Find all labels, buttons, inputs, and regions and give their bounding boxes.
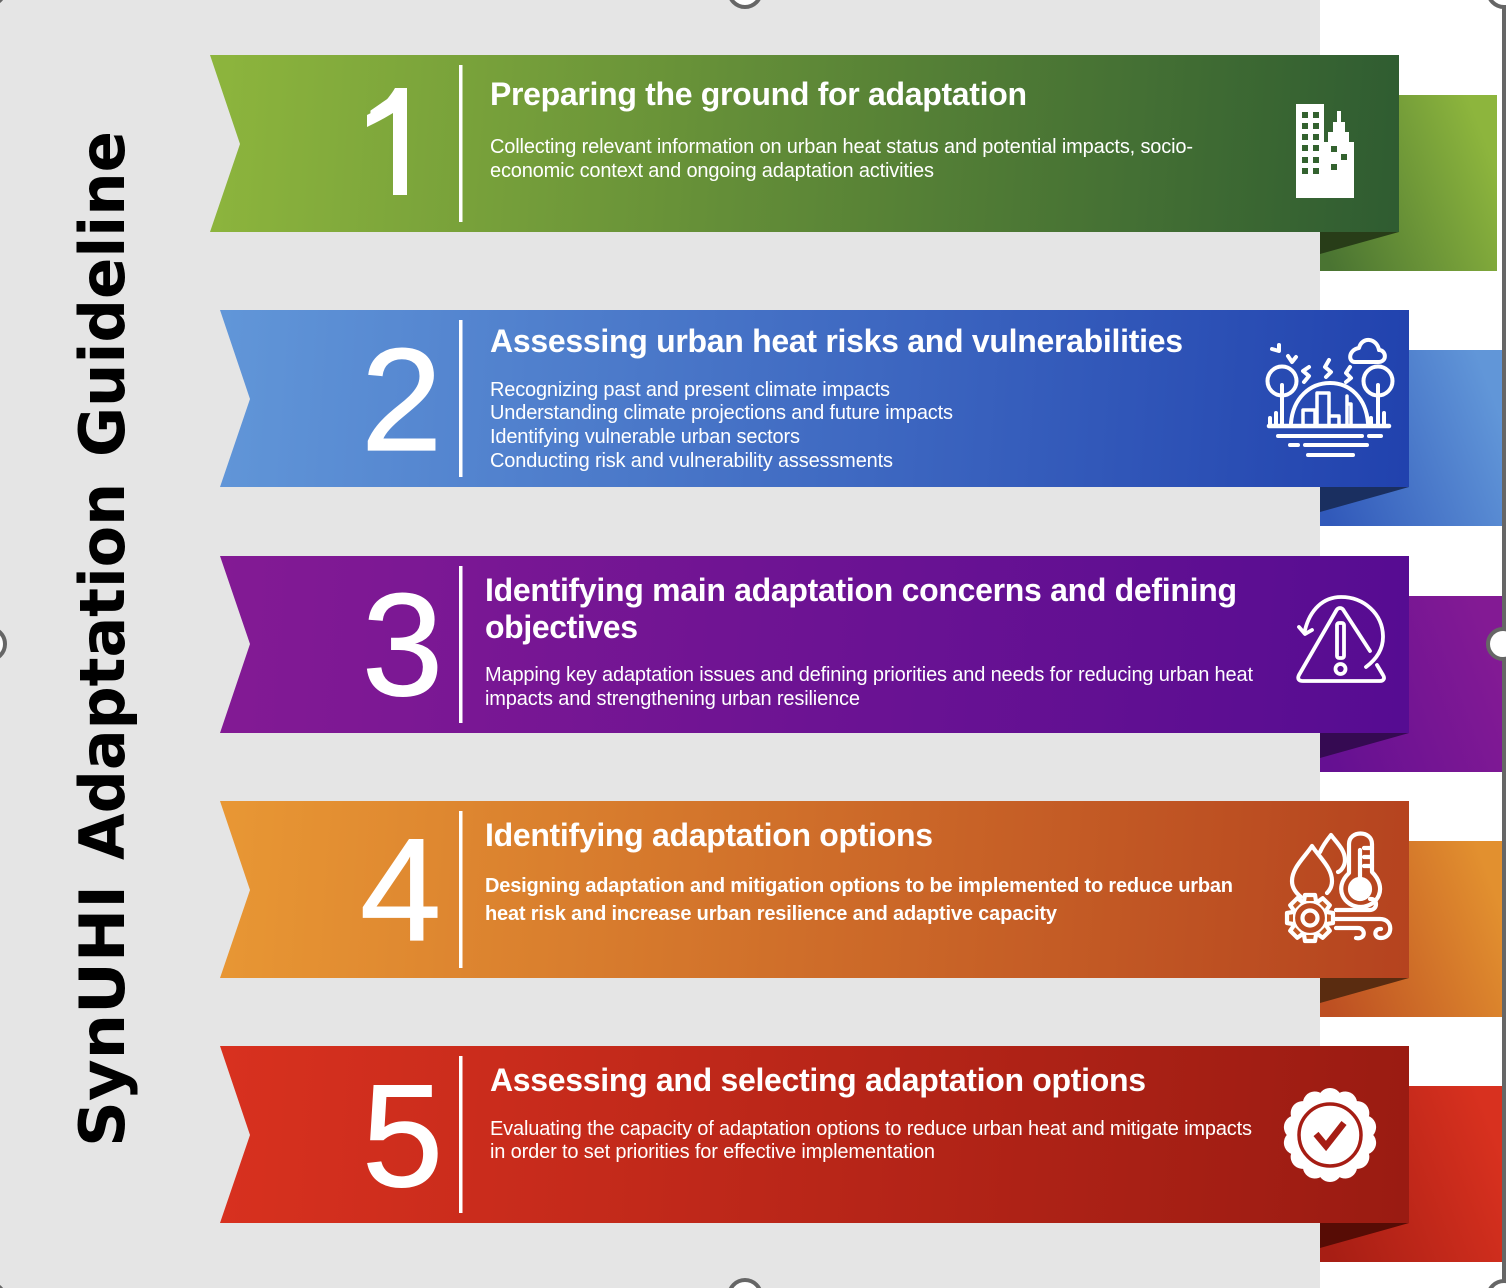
description 1: Collecting relevant information on urban heat status and potential impacts, socio- (490, 136, 1193, 158)
panel: step 4 (220, 801, 1504, 1017)
heading 3 (485, 572, 1237, 645)
heading 4: Identifying adaptation options (485, 817, 933, 853)
ribbon fold 4 (1320, 978, 1409, 1003)
ribbon front 2 (220, 310, 1409, 487)
heading 3: objectives (485, 609, 638, 645)
description 5 (490, 1118, 1252, 1163)
icon: warning with circular arrow (1298, 597, 1384, 681)
title: SynUHI Adaptation Guideline: Adaptation (66, 483, 139, 860)
number 4: 4 (360, 808, 441, 971)
icon: approval badge with check mark (1282, 1087, 1378, 1183)
ribbon back 5 (1320, 1086, 1504, 1262)
description 1 (490, 136, 1193, 182)
description 2: Recognizing past and present climate impacts (490, 379, 890, 401)
description 2 (490, 379, 953, 472)
number 1 (367, 88, 407, 195)
description 2: Identifying vulnerable urban sectors (490, 426, 800, 448)
divider 1 (459, 65, 462, 222)
number 2: 2 (361, 318, 442, 481)
description 3: impacts and strengthening urban resilience (485, 688, 860, 710)
ribbon fold 3 (1320, 733, 1409, 758)
divider 3 (459, 566, 462, 723)
panel: step 5 (220, 1046, 1504, 1262)
title: SynUHI Adaptation Guideline: SynUHI (66, 885, 139, 1147)
icon: water, temperature, gear and wind (1287, 834, 1390, 941)
heading 2: Assessing urban heat risks and vulnerabilities (490, 323, 1183, 359)
heading 5: Assessing and selecting adaptation options (490, 1062, 1146, 1098)
ribbon back 3 (1320, 596, 1504, 772)
title: SynUHI Adaptation Guideline (66, 131, 139, 1147)
ribbon back 4 (1320, 841, 1504, 1017)
panel: step 3 (220, 556, 1504, 772)
divider 5 (459, 1056, 462, 1213)
description 1: economic context and ongoing adaptation activities (490, 160, 934, 182)
heading 3: Identifying main adaptation concerns and defining (485, 572, 1237, 608)
ribbon fold 1 (1320, 232, 1399, 254)
description 2: Understanding climate projections and future impacts (490, 402, 953, 424)
ribbon front 5 (220, 1046, 1409, 1223)
description 4 (485, 875, 1233, 925)
icon: buildings (1296, 104, 1354, 198)
number 1: 1 (357, 63, 438, 226)
ribbon fold 2 (1320, 487, 1409, 512)
heading 1: Preparing the ground for adaptation (490, 76, 1027, 112)
ribbon front 1 (210, 55, 1399, 232)
title: SynUHI Adaptation Guideline: Guideline (66, 131, 139, 457)
description 5: in order to set priorities for effective implementation (490, 1141, 935, 1163)
panel: step 2 (220, 310, 1504, 526)
ribbon front 4 (220, 801, 1409, 978)
description 5: Evaluating the capacity of adaptation options to reduce urban heat and mitigate impacts (490, 1118, 1252, 1140)
ribbon back 1 (1320, 95, 1497, 271)
description 3 (485, 664, 1253, 710)
divider 4 (459, 811, 462, 968)
ribbon fold 5 (1320, 1223, 1409, 1248)
number 5: 5 (362, 1054, 443, 1217)
ribbon back 2 (1320, 350, 1504, 526)
divider 2 (459, 320, 462, 477)
description 2: Conducting risk and vulnerability assessments (490, 450, 893, 472)
number 3: 3 (362, 563, 443, 726)
description 3: Mapping key adaptation issues and defining priorities and needs for reducing urban heat (485, 664, 1253, 686)
ribbon front 3 (220, 556, 1409, 733)
icon: city under heat dome (1268, 340, 1392, 455)
description 4: Designing adaptation and mitigation options to be implemented to reduce urban (485, 875, 1233, 897)
panel: step 1 (210, 55, 1497, 271)
description 4: heat risk and increase urban resilience and adaptive capacity (485, 903, 1058, 925)
